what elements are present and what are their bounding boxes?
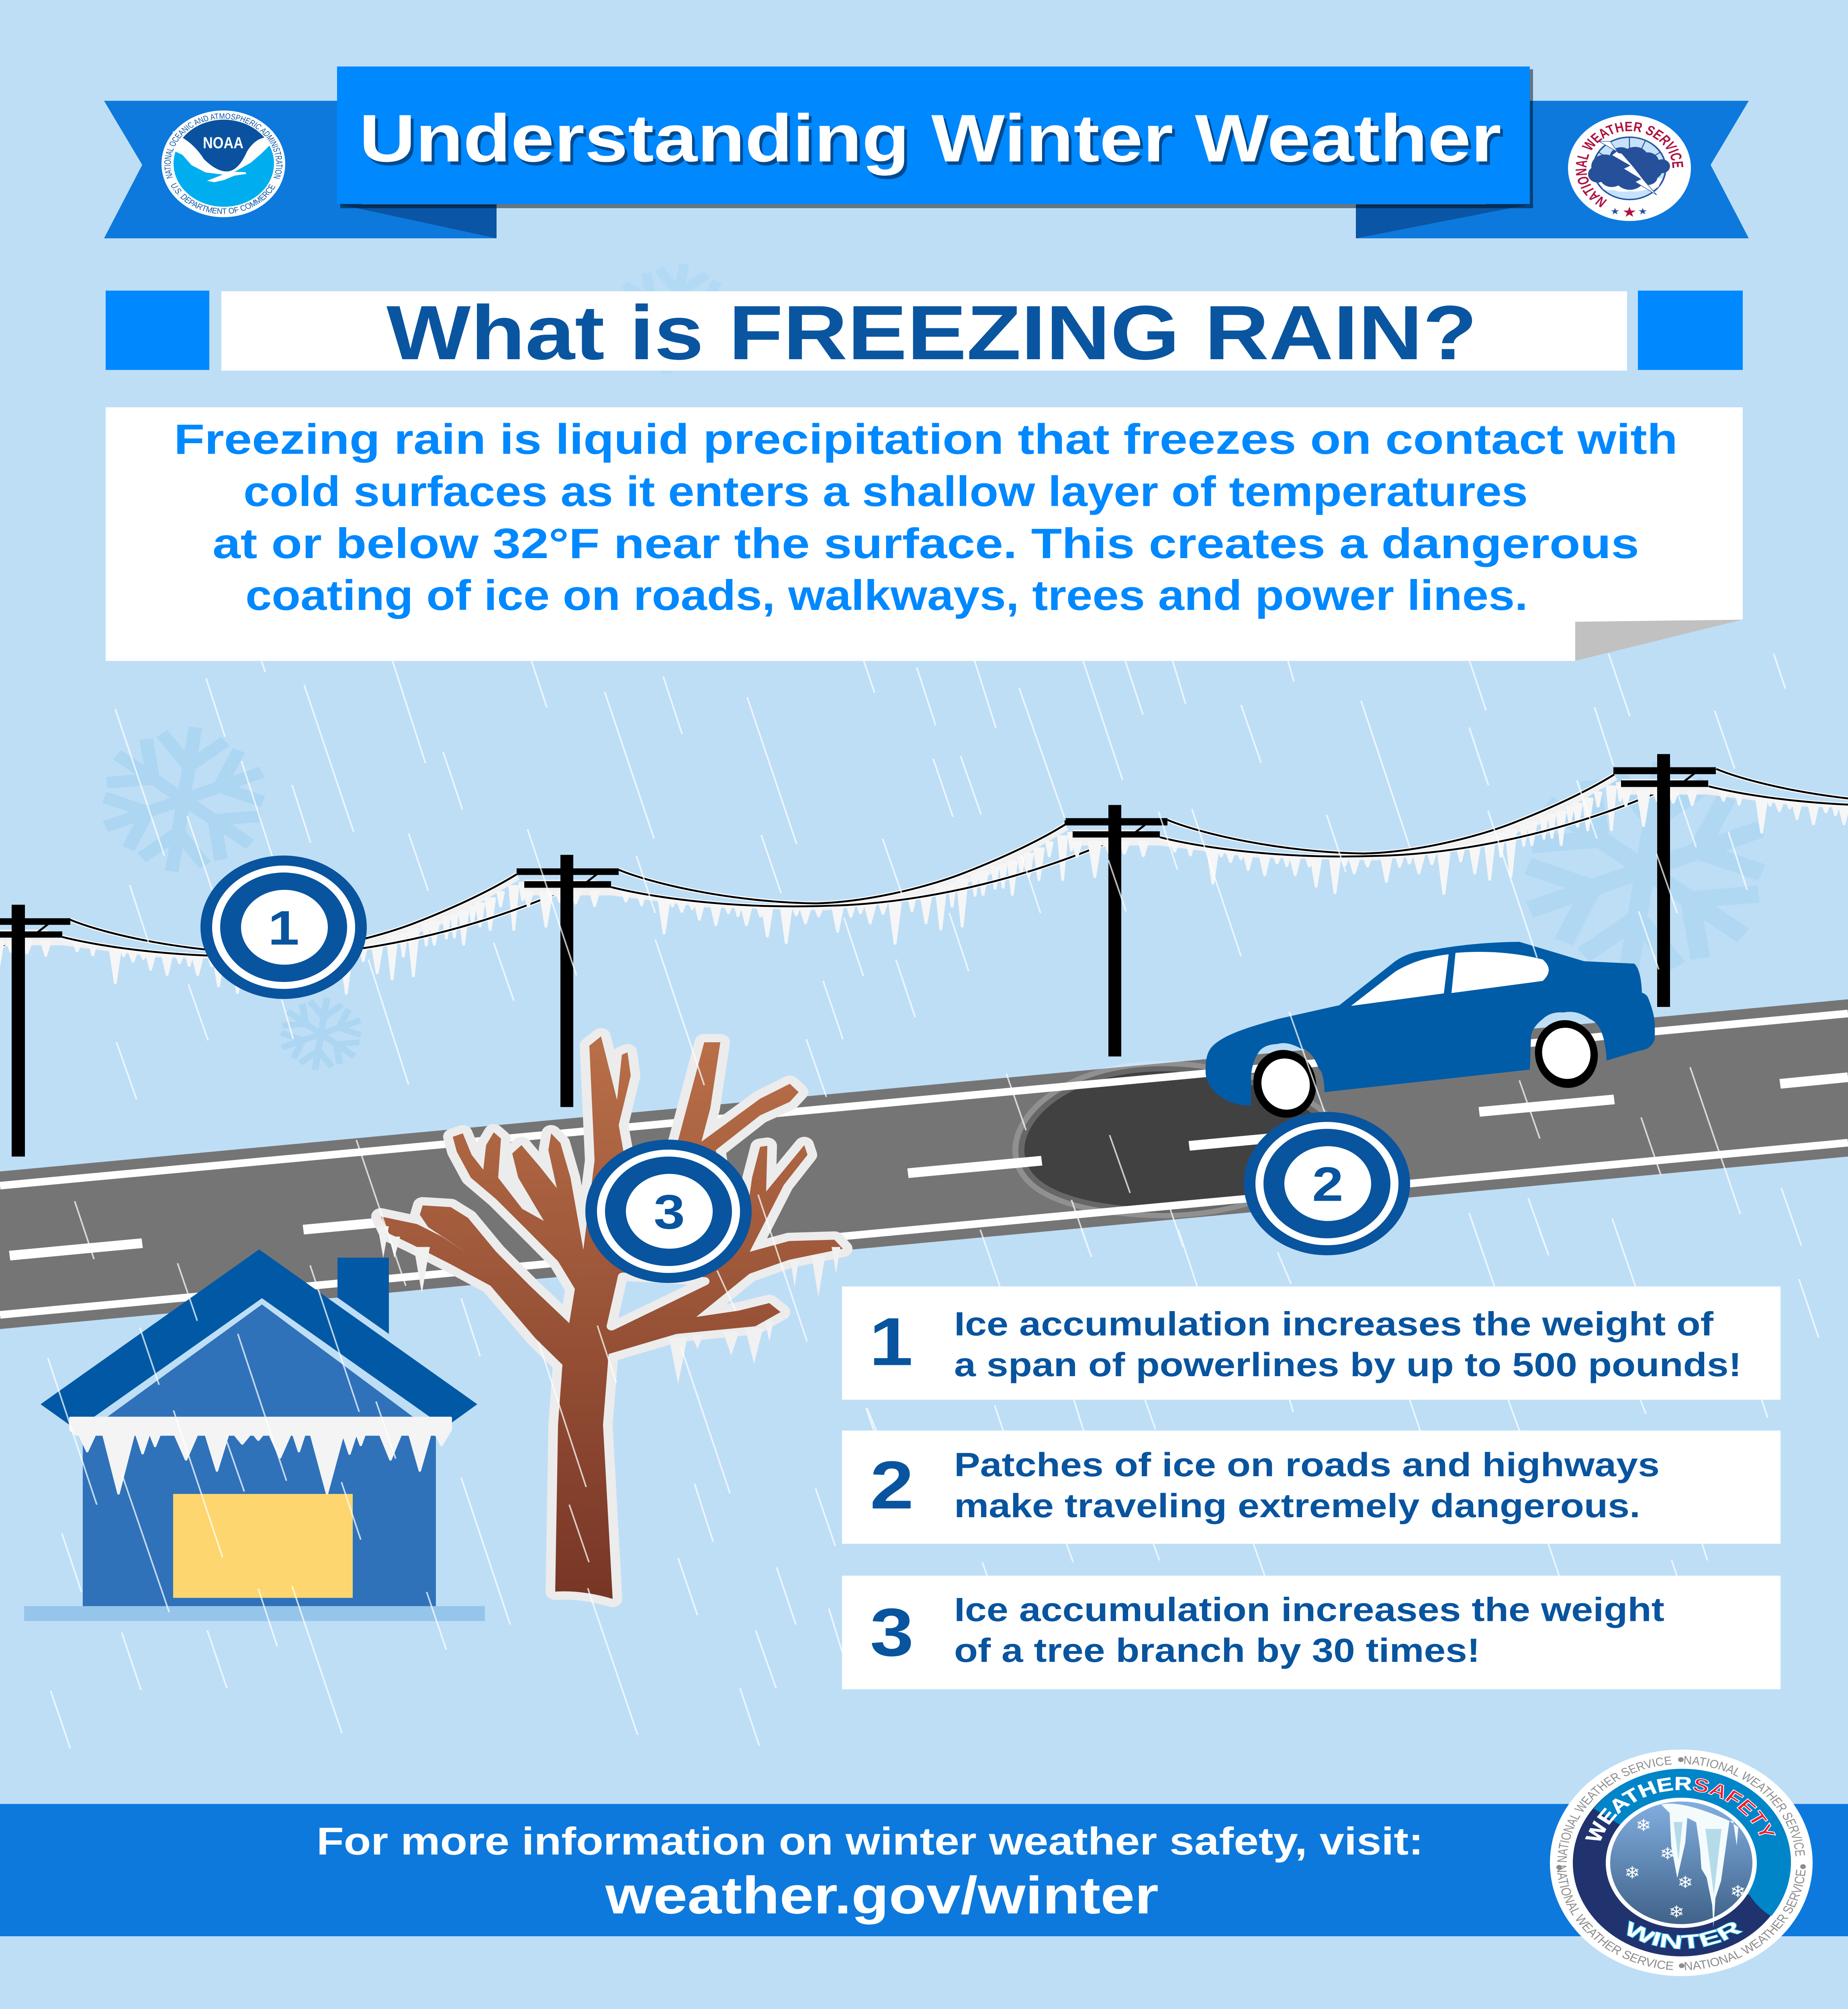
badge snowflakes: ❄ (1677, 1872, 1693, 1892)
road edge lines (0, 1013, 1848, 1315)
right ribbon fold (1356, 205, 1530, 238)
tree icicles (378, 1226, 840, 1384)
falling rain (48, 654, 1819, 1749)
badge outer text: NATIONAL WEATHER SERVICE (1683, 1753, 1808, 1857)
NOAA ring text top: NATIONAL OCEANIC AND ATMOSPHERIC ADMINISTRATION (162, 112, 284, 180)
NWS stars: ★ (1622, 204, 1637, 220)
badge blue sector (1594, 1769, 1791, 1916)
fact 1 (842, 1287, 1781, 1400)
banner shadow (340, 69, 1533, 208)
right ribbon tail (1356, 101, 1749, 238)
badge outer text (1554, 1753, 1809, 1973)
definition text: at or below 32°F near the surface. This creates a dangerous (213, 520, 1639, 567)
title banner (104, 67, 1749, 238)
NWS ring text: NATIONAL WEATHER SERVICE (1572, 119, 1687, 210)
fact 2 (842, 1430, 1781, 1544)
ice patch (1018, 1066, 1336, 1213)
winter weather safety badge (1550, 1749, 1813, 1976)
background snowflakes (84, 256, 1793, 1075)
footer band (0, 1804, 1848, 1936)
marker 3 (585, 1140, 752, 1283)
badge icicles (1661, 1804, 1738, 1927)
badge outer text: NATIONAL WEATHER SERVICE (1554, 1865, 1674, 1973)
utility poles (0, 754, 1716, 1156)
badge title text: WEATHERSAFETY (1581, 1773, 1780, 1845)
roof (41, 1249, 477, 1428)
definition text (174, 415, 1678, 619)
NWS stars (1610, 204, 1648, 220)
badge navy ring (1573, 1769, 1790, 1956)
car rear window (1451, 952, 1549, 993)
heading text: What is FREEZING RAIN? (386, 289, 1477, 376)
snowflake upper left (84, 717, 284, 882)
definition text: coating of ice on roads, walkways, trees and power lines. (245, 572, 1528, 619)
iced power lines (0, 724, 1848, 1156)
car rear wheel (1531, 1017, 1602, 1090)
definition panel (106, 407, 1743, 661)
house (24, 1249, 485, 1621)
badge snowflakes: ❄ (1660, 1844, 1676, 1864)
NOAA logo (161, 110, 285, 217)
snowflake large right (1498, 747, 1793, 992)
tree (378, 1036, 843, 1599)
road centre dashes (10, 1077, 1848, 1256)
NWS inner dial (1593, 137, 1666, 200)
banner face (337, 67, 1530, 204)
snowflake small (271, 992, 371, 1075)
badge outer text: NATIONAL WEATHER SERVICE (1683, 1869, 1809, 1973)
car front window (1351, 954, 1449, 1006)
title text: Understanding Winter Weather (359, 101, 1501, 176)
left ribbon tail (104, 101, 497, 238)
fact 3: of a tree branch by 30 times! (954, 1632, 1480, 1669)
roof ice (70, 1418, 451, 1493)
fact 1: 1 (869, 1303, 913, 1379)
NWS logo (1568, 115, 1691, 221)
NWS stars: ★ (1610, 206, 1620, 217)
fact 3: 3 (870, 1594, 914, 1670)
NOAA sky (183, 120, 264, 172)
NOAA sea (174, 120, 274, 207)
chimney (337, 1258, 389, 1334)
heading white bar (221, 291, 1627, 370)
NWS white field (1597, 178, 1662, 192)
paper (106, 407, 1743, 661)
footer url: weather.gov/winter (605, 1866, 1159, 1925)
marker 3: 3 (654, 1185, 685, 1239)
NWS lightning bolt (1599, 141, 1657, 195)
NWS stars: ★ (1638, 206, 1648, 217)
definition text: Freezing rain is liquid precipitation that freezes on contact with (174, 415, 1678, 463)
car (1206, 942, 1655, 1120)
footer prompt: For more information on winter weather safety, visit: (317, 1820, 1423, 1863)
badge outer text: NATIONAL WEATHER SERVICE (1554, 1754, 1672, 1863)
badge inner circle (1606, 1798, 1757, 1928)
road (0, 999, 1848, 1329)
car body (1206, 942, 1655, 1105)
fact 2: 2 (870, 1447, 914, 1523)
marker 2 (1244, 1112, 1410, 1255)
roof light trim (93, 1298, 431, 1418)
badge snowflakes: ❄ (1624, 1863, 1640, 1882)
marker 2: 2 (1312, 1157, 1343, 1211)
badge winter text: WINTER (1620, 1917, 1745, 1954)
gap between trunk and branch (611, 1277, 705, 1326)
heading right block (1638, 291, 1743, 370)
snowflake behind heading (599, 256, 751, 382)
NWS cloud (1588, 147, 1670, 190)
tree trunk and branches (381, 1036, 843, 1599)
fact 2: Patches of ice on roads and highways (954, 1446, 1660, 1484)
badge snowflakes: ❄ (1635, 1815, 1652, 1835)
fact 2: make traveling extremely dangerous. (954, 1487, 1640, 1524)
badge snowflakes (1624, 1815, 1746, 1922)
fact 3 (842, 1576, 1781, 1689)
fact 1: Ice accumulation increases the weight of (954, 1305, 1714, 1343)
marker 1 (200, 855, 367, 999)
badge snowflakes: ❄ (1711, 1837, 1727, 1856)
fact 3: Ice accumulation increases the weight (954, 1591, 1664, 1628)
window (173, 1494, 353, 1598)
ground slab (24, 1606, 485, 1621)
badge snowflakes: ❄ (1730, 1882, 1746, 1901)
NOAA bird (173, 118, 273, 182)
NOAA ring text bottom: U.S. DEPARTMENT OF COMMERCE (168, 182, 278, 216)
wall (83, 1305, 436, 1606)
definition text: cold surfaces as it enters a shallow layer of temperatures (243, 468, 1528, 516)
NOAA wordmark: NOAA (203, 134, 243, 152)
heading left block (106, 291, 209, 370)
heading bar (106, 289, 1743, 376)
fact 1: a span of powerlines by up to 500 pounds! (954, 1346, 1742, 1383)
marker 1: 1 (268, 901, 299, 955)
badge snowflakes: ❄ (1668, 1902, 1684, 1922)
badge ring dots (1556, 1757, 1806, 1968)
car front wheel (1249, 1047, 1320, 1120)
asphalt (0, 999, 1848, 1329)
left ribbon fold (339, 205, 497, 238)
folded corner (1575, 620, 1743, 661)
